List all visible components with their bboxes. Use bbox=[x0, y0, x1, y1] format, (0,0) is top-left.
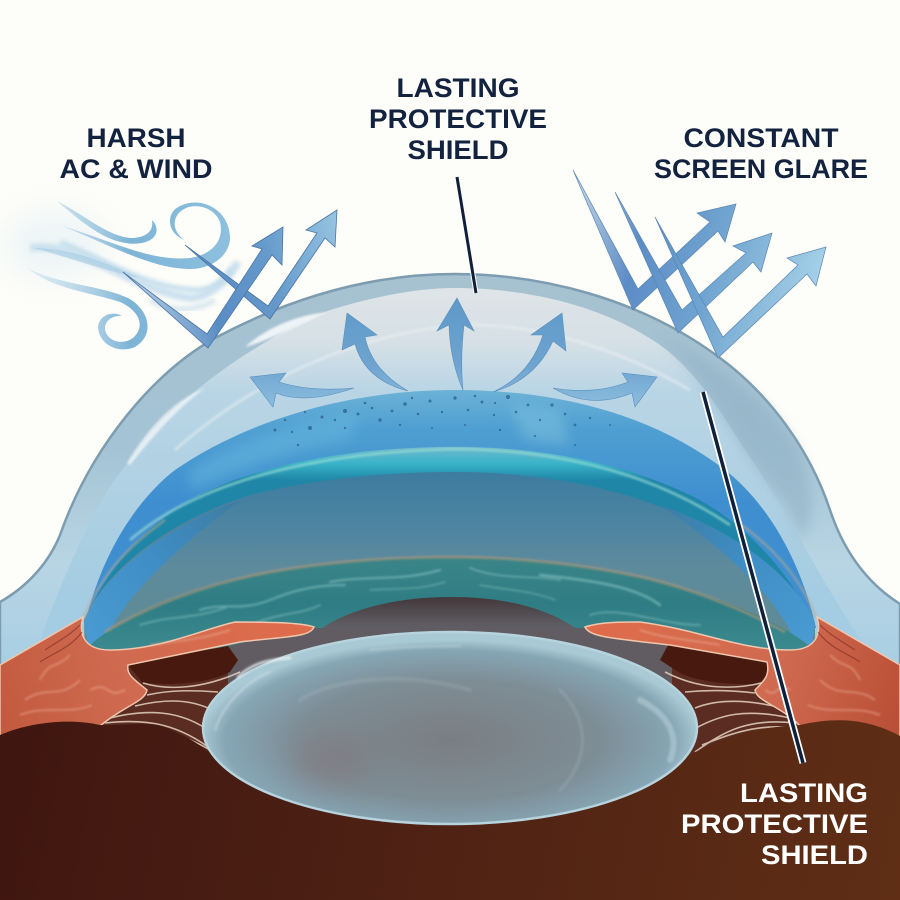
protective shield layer bbox=[40, 288, 860, 640]
anterior chamber bbox=[84, 472, 815, 655]
label: lasting protective shield bottom: SHIELD bbox=[761, 840, 868, 870]
ciliary tissue right bbox=[585, 617, 900, 760]
label: lasting protective shield top: PROTECTIVE bbox=[369, 104, 547, 134]
posterior dark body bbox=[0, 720, 900, 900]
tissue texture bbox=[20, 630, 880, 715]
dark pocket right bbox=[660, 645, 770, 684]
label: lasting protective shield top bbox=[369, 73, 547, 165]
arrows: wind deflected off the shield bbox=[123, 210, 337, 348]
dark pocket left bbox=[128, 646, 238, 684]
shield inner sheen bbox=[175, 325, 690, 450]
outer cornea dome bbox=[0, 274, 900, 900]
label: lasting protective shield bottom: PROTECTIVE bbox=[681, 809, 868, 839]
label: lasting protective shield top: LASTING bbox=[396, 73, 520, 103]
label: constant screen glare bbox=[654, 123, 868, 184]
lens bbox=[203, 632, 697, 824]
iris rim bbox=[105, 557, 785, 632]
lens reddish core bbox=[290, 734, 370, 786]
speckled moisture droplets bbox=[274, 395, 611, 446]
band shading right bbox=[650, 330, 811, 540]
arrows: screen glare deflected off the shield bbox=[573, 170, 826, 358]
chamber corner right bbox=[660, 505, 815, 645]
label: lasting protective shield top: SHIELD bbox=[408, 135, 508, 165]
highlights on dome bbox=[127, 312, 327, 465]
eye illustration: cornea dome and anterior segment bbox=[0, 274, 900, 900]
label: lasting protective shield bottom: LASTING bbox=[740, 778, 868, 808]
tan border of the chamber bbox=[84, 520, 816, 618]
lens highlights bbox=[215, 646, 673, 790]
zonule region bbox=[100, 640, 800, 780]
pupil and space behind the iris bbox=[295, 597, 605, 655]
grey space behind iris bbox=[228, 628, 672, 700]
label: lasting protective shield bottom bbox=[681, 778, 868, 870]
chamber corner left bbox=[84, 500, 240, 645]
label: harsh AC and wind: AC & WIND bbox=[60, 154, 212, 184]
iris bbox=[90, 557, 808, 655]
leader line: top shield label bbox=[457, 177, 476, 293]
icon: wind swirls bbox=[5, 201, 238, 349]
lighter patches in the blue layer bbox=[190, 405, 570, 490]
blue tear film layer bbox=[84, 390, 816, 628]
label: constant screen glare: CONSTANT bbox=[684, 123, 839, 153]
leader line: bottom shield label bbox=[703, 392, 803, 763]
teal epithelium band bbox=[85, 447, 815, 625]
label: harsh AC and wind: HARSH bbox=[86, 123, 186, 153]
label: constant screen glare: SCREEN GLARE bbox=[654, 154, 868, 184]
iris fibres bbox=[140, 568, 700, 625]
arrows: shield radiating outward bbox=[250, 298, 657, 407]
ciliary tissue left bbox=[0, 617, 314, 760]
label: harsh AC and wind bbox=[60, 123, 212, 184]
zonule fibres right bbox=[665, 672, 795, 752]
zonule fibres left bbox=[105, 672, 240, 752]
